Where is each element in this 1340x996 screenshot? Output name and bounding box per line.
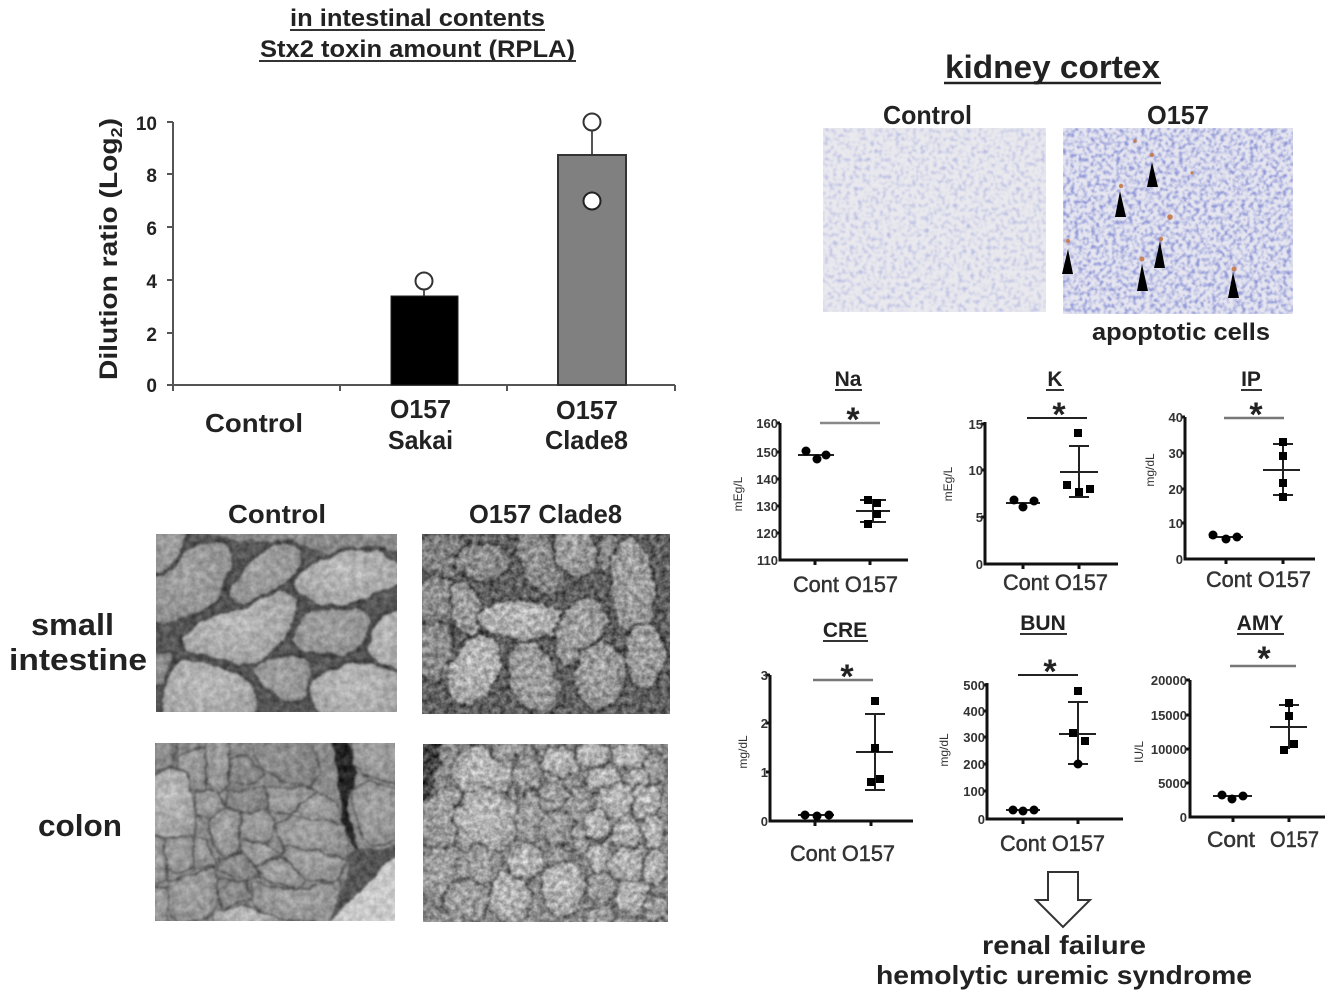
dot plot: IP: *: [1249, 396, 1263, 434]
dot plot: BUN: 100: [963, 784, 985, 799]
dot plot: Na: 130: [756, 499, 778, 514]
dot plot: IP: IP: [1241, 368, 1261, 391]
dot plot: CRE: *: [840, 658, 854, 696]
kidney column headings: O157: [1147, 100, 1209, 130]
dot plot: CRE: 1: [761, 765, 768, 780]
dot plot: BUN: Cont O157: [1000, 831, 1105, 856]
dot plot: AMY: 20000: [1151, 673, 1187, 688]
dot plot: K: [941, 368, 1118, 595]
bar: O157 Sakai: [391, 272, 458, 385]
y tick labels: 2: [146, 325, 157, 346]
histology image: kidney O157 with apoptotic cell arrowheads: [1062, 128, 1293, 314]
dot plot: Na: 140: [756, 472, 778, 487]
dot plot: BUN: [937, 612, 1123, 856]
dot plot: Na: *: [846, 401, 860, 439]
row label: colon: colon: [38, 808, 122, 843]
dot plot: K: 15: [969, 417, 983, 432]
dot plot: BUN: 300: [963, 730, 985, 745]
dot plot: CRE: CRE: [823, 619, 867, 642]
dot plot: Na: 120: [756, 526, 778, 541]
dot plot: K: mEg/L: [941, 466, 955, 501]
micrograph: colon control: [155, 743, 395, 921]
dot plot: CRE: [736, 619, 913, 866]
micrograph: small intestine O157: [422, 534, 670, 714]
dot plot: IP: Cont O157: [1206, 567, 1311, 592]
dot plot: Na: [731, 368, 908, 597]
dot plot: BUN: 0: [978, 812, 985, 827]
dot plot: BUN: 200: [963, 757, 985, 772]
histology image: kidney control: [823, 128, 1046, 312]
y axis label: 2: [109, 127, 126, 137]
dot plot: IP: mg/dL: [1143, 453, 1157, 487]
dot plot: BUN: 500: [963, 678, 985, 693]
dot plot: CRE: Cont O157: [790, 841, 895, 866]
x category labels: O157: [556, 395, 618, 425]
micrograph column headings: Control: [228, 499, 326, 529]
title: Stx2 toxin amount: in intestinal contents: [290, 5, 545, 32]
dot plot: AMY: [1132, 612, 1325, 852]
row label: small intestine: [9, 607, 147, 677]
x category labels: [205, 394, 628, 455]
dot plot: K: 10: [969, 463, 983, 478]
conclusion text: hemolytic uremic syndrome: [876, 960, 1252, 990]
dot plot: CRE: mg/dL: [736, 735, 750, 769]
y tick labels: 4: [146, 272, 157, 293]
dot plot: BUN: BUN: [1020, 612, 1066, 635]
dot plot: IP: 30: [1169, 446, 1183, 461]
dot plot: K: 0: [976, 557, 983, 572]
y axis and ticks: [167, 122, 675, 391]
conclusion text: [876, 930, 1252, 990]
dot plot: CRE: 3: [761, 668, 768, 683]
y tick labels: 10: [136, 114, 157, 135]
y tick labels: 8: [146, 166, 157, 187]
dot plot: AMY: 15000: [1151, 708, 1187, 723]
bar chart: dilution ratio: [95, 114, 675, 455]
dot plot: Na: 160: [756, 416, 778, 431]
dot plot: AMY: Cont: [1207, 827, 1255, 852]
dot plot: AMY: 5000: [1158, 776, 1187, 791]
dot plot: Na: 150: [756, 445, 778, 460]
x category labels: Clade8: [545, 425, 628, 455]
dot plot: K: Cont O157: [1003, 570, 1108, 595]
dot plot: AMY: 0: [1180, 810, 1187, 825]
dot plot: BUN: *: [1043, 653, 1057, 691]
dot plot: K: *: [1052, 396, 1066, 434]
dot plot: IP: 20: [1169, 482, 1183, 497]
y axis label: ): [95, 118, 123, 127]
kidney column headings: [883, 100, 1209, 130]
dot plot: AMY: *: [1257, 640, 1271, 678]
kidney column headings: Control: [883, 100, 972, 130]
dot plot: IP: [1143, 368, 1315, 592]
micrograph: colon O157: [423, 744, 668, 922]
y tick labels: 6: [146, 219, 157, 240]
dot plot: CRE: 2: [761, 716, 768, 731]
micrograph column headings: [228, 499, 622, 529]
micrograph: small intestine control: [156, 534, 397, 712]
x category labels: Sakai: [388, 425, 453, 455]
y tick labels: 0: [146, 376, 157, 397]
bar: O157 Clade8: [558, 114, 626, 385]
dot plot: Na: Cont O157: [793, 572, 898, 597]
dot plot: AMY: AMY: [1237, 612, 1283, 635]
dot plot: CRE: 0: [761, 814, 768, 829]
dot plot: K: K: [1047, 368, 1063, 391]
micrograph column headings: O157 Clade8: [469, 499, 622, 529]
caption: apoptotic cells: apoptotic cells: [1092, 319, 1270, 346]
dot plot: Na: 110: [757, 553, 778, 568]
conclusion text: renal failure: [982, 930, 1146, 960]
dot plot: IP: 0: [1176, 552, 1183, 567]
dot plot: AMY: 10000: [1151, 742, 1187, 757]
dot plot: AMY: IU/L: [1132, 741, 1146, 763]
dot plot: BUN: 400: [963, 704, 985, 719]
dot plot: IP: 10: [1169, 516, 1183, 531]
dot plot: AMY: O157: [1270, 827, 1319, 852]
dot plot: IP: 40: [1169, 410, 1183, 425]
apoptotic cells (brown spots): [1066, 139, 1236, 272]
arrowheads: [1062, 162, 1239, 298]
arrow: leads to renal failure: [1036, 872, 1090, 927]
title: Stx2 toxin amount: Stx2 toxin amount (RPLA): [260, 36, 575, 63]
y axis label: Dilution ratio (Log: [95, 165, 123, 380]
y tick labels: [136, 114, 157, 397]
x category labels: Control: [205, 408, 303, 438]
dot plot: BUN: mg/dL: [937, 733, 951, 767]
dot plot: K: 5: [976, 510, 983, 525]
x category labels: O157: [390, 394, 451, 424]
heading: kidney cortex: kidney cortex: [945, 49, 1160, 85]
title: Stx2 toxin amount: [259, 5, 576, 63]
dot plot: Na: mEg/L: [731, 476, 745, 511]
dot plot: Na: Na: [835, 368, 862, 391]
row label: small intestine: small: [31, 607, 114, 642]
row label: small intestine: intestine: [9, 642, 147, 677]
